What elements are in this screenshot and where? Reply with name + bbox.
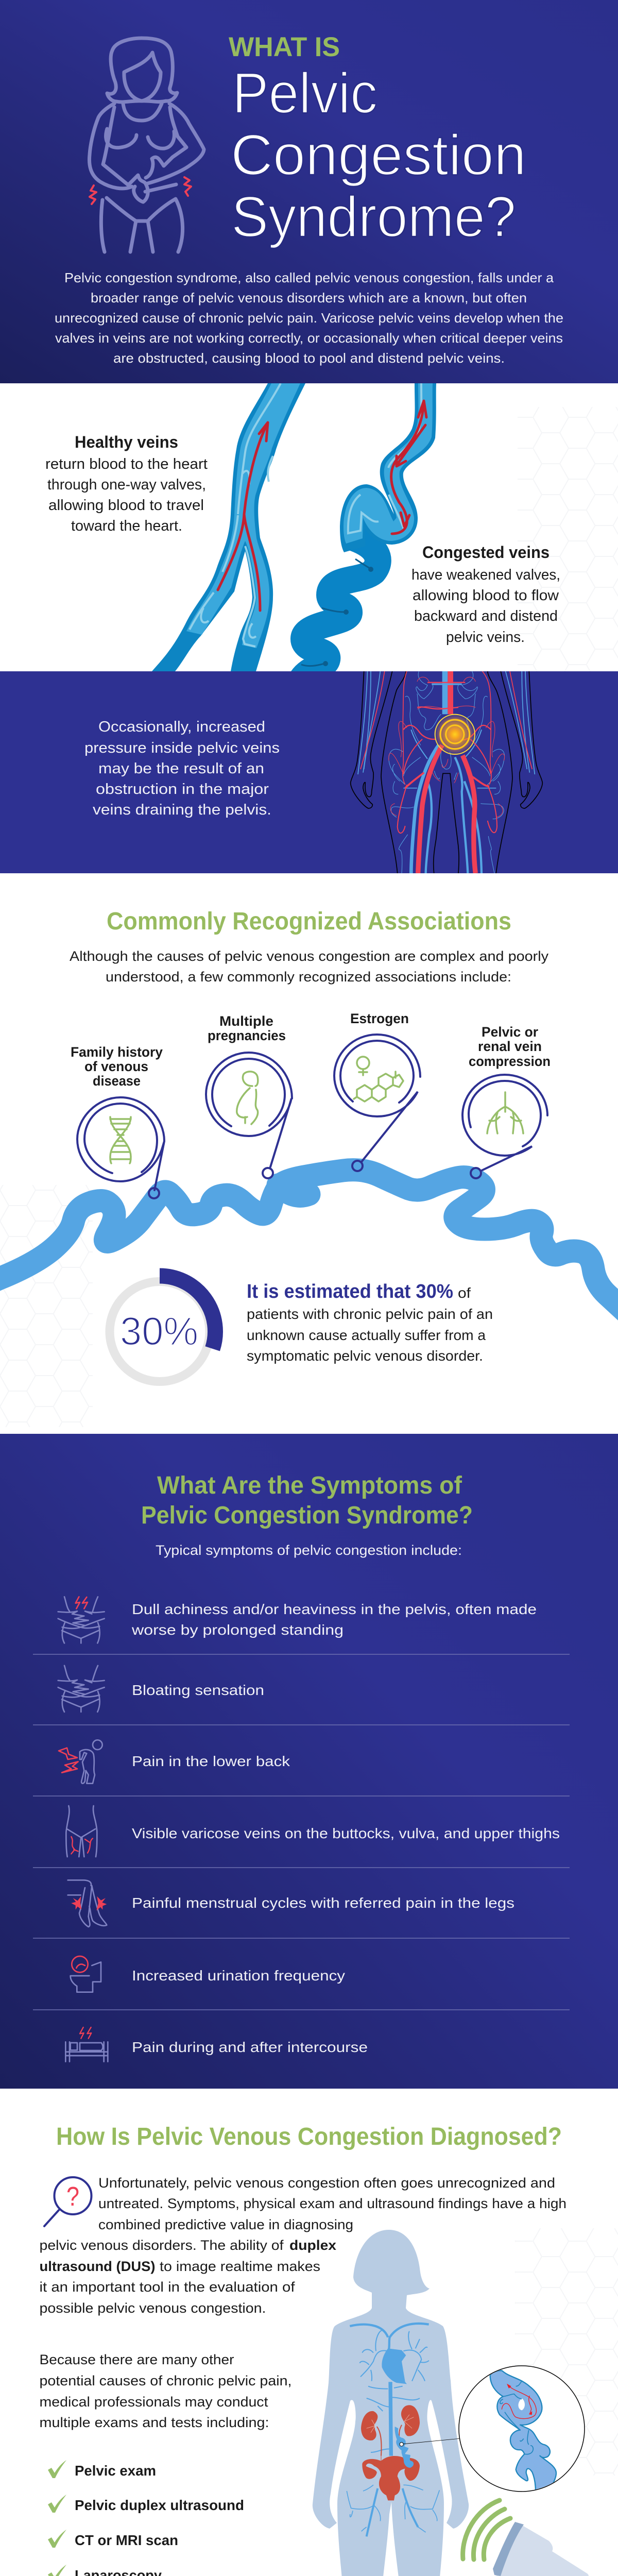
- illustration: healthy vein: [152, 383, 305, 671]
- callout: 30 percent statistic: unknown cause actually suffer from a: [247, 1327, 486, 1343]
- icon: magnifying glass question mark: [44, 2177, 92, 2226]
- text block: congested veins: pelvic veins.: [446, 629, 525, 646]
- symptom: dull achiness: Dull achiness and/or heaviness in the pelvis, often made: [132, 1601, 537, 1617]
- symptom: lower back pain: Pain in the lower back: [132, 1753, 290, 1769]
- symptom: urination frequency: Increased urination frequency: [132, 1968, 345, 1984]
- callout: pelvic or renal vein compression: renal vein: [478, 1039, 542, 1054]
- callout: pelvic or renal vein compression: Pelvic or: [482, 1024, 538, 1040]
- text block: healthy veins: [45, 433, 208, 534]
- heading: Pelvic Congestion Syndrome?: [141, 1502, 473, 1529]
- checklist: exams: Pelvic duplex ultrasound: [75, 2497, 244, 2513]
- text block: healthy veins: toward the heart.: [71, 518, 182, 534]
- callout: estrogen: Estrogen: [350, 1011, 409, 1026]
- callout: family history: [71, 1044, 164, 1198]
- text block: exams intro: Because there are many other: [39, 2352, 234, 2367]
- illustration: female silhouette with veins and organs: [313, 2230, 469, 2576]
- text block: congested veins: have weakened valves,: [411, 567, 560, 583]
- symptom: lower back pain: [59, 1740, 290, 1784]
- text block: obstruction: pressure inside pelvic veins: [84, 740, 280, 756]
- illustration: body vascular system: [351, 671, 542, 873]
- text block: diagnosis explanation: pelvic venous disorders. The ability of: [39, 2238, 284, 2253]
- text block: introduction: valves in veins are not working correctly, or occasionally when critical deeper veins: [55, 330, 563, 346]
- callout: estrogen: [334, 1011, 420, 1171]
- symptom: dull achiness: [58, 1597, 537, 1643]
- symptom: bloating: [58, 1666, 264, 1712]
- text block: obstruction: Occasionally, increased: [98, 719, 265, 735]
- checklist: exams: CT or MRI scan: [75, 2532, 178, 2548]
- text block: exams intro: multiple exams and tests including:: [39, 2415, 269, 2430]
- title: Congestion: [231, 123, 526, 187]
- text block: diagnosis explanation: possible pelvic venous congestion.: [39, 2300, 266, 2316]
- text block: congested veins: [411, 543, 560, 646]
- icon: woman with pelvic pain: [89, 38, 204, 252]
- text block: obstruction: [84, 719, 280, 818]
- text block: congested veins: backward and distend: [414, 608, 558, 624]
- symptom: pain during intercourse: [65, 2027, 368, 2062]
- symptom: bloating: Bloating sensation: [132, 1682, 264, 1698]
- callout: pelvic or renal vein compression: [462, 1024, 551, 1178]
- text block: diagnosis explanation: ultrasound (DUS): [39, 2259, 156, 2274]
- text block: obstruction: veins draining the pelvis.: [93, 802, 271, 818]
- text block: obstruction: obstruction in the major: [96, 781, 269, 798]
- checklist: exams: [48, 2460, 244, 2576]
- callout: 30 percent statistic: of: [458, 1285, 471, 1301]
- title: Pelvic: [232, 61, 377, 125]
- text block: healthy veins: Healthy veins: [75, 433, 178, 451]
- checklist: exams: Pelvic exam: [75, 2463, 156, 2479]
- heading: [141, 1472, 473, 1529]
- text block: associations intro: [70, 948, 549, 985]
- text block: exams intro: [39, 2352, 291, 2430]
- text block: diagnosis explanation: Unfortunately, pelvic venous congestion often goes unrecognized and: [98, 2175, 555, 2191]
- icon: magnifying glass question mark: ?: [66, 2182, 79, 2212]
- panel: header: [0, 0, 618, 383]
- text block: diagnosis explanation: duplex: [289, 2238, 336, 2253]
- text block: introduction: unrecognized cause of chronic pelvic pain. Varicose pelvic veins develop when the: [55, 310, 563, 326]
- callout: pelvic or renal vein compression: compression: [469, 1054, 551, 1069]
- text block: obstruction: may be the result of an: [98, 760, 264, 777]
- symptom: painful menstrual cycles: [68, 1880, 514, 1927]
- symptom: varicose veins: Visible varicose veins on the buttocks, vulva, and upper thighs: [132, 1825, 560, 1841]
- text block: healthy veins: allowing blood to travel: [48, 497, 204, 514]
- text block: diagnosis explanation: [39, 2175, 566, 2316]
- illustration: ultrasound probe: [463, 2500, 618, 2576]
- symptom: urination frequency: [71, 1956, 345, 1992]
- text block: symptoms intro: Typical symptoms of pelvic congestion include:: [156, 1543, 462, 1558]
- title: [229, 32, 526, 249]
- callout: 30 percent statistic: patients with chronic pelvic pain of an: [247, 1306, 493, 1322]
- callout: family history: disease: [93, 1073, 141, 1089]
- illustration: vein squiggle: [0, 1170, 618, 1319]
- text block: healthy veins: through one-way valves,: [47, 477, 206, 493]
- text block: diagnosis explanation: to image realtime makes: [160, 2259, 320, 2274]
- symptom: varicose veins: [66, 1806, 560, 1857]
- text block: diagnosis explanation: combined predictive value in diagnosing: [98, 2217, 353, 2232]
- heading: Commonly Recognized Associations: [107, 908, 511, 935]
- title: Syndrome?: [231, 185, 516, 249]
- text block: exams intro: potential causes of chronic pelvic pain,: [39, 2373, 291, 2388]
- callout: family history: of venous: [84, 1059, 148, 1074]
- symptom: painful menstrual cycles: Painful menstrual cycles with referred pain in the legs: [132, 1895, 514, 1911]
- callout: 30 percent statistic: It is estimated that 30%: [247, 1281, 453, 1302]
- text block: introduction: are obstructed, causing blood to pool and distend pelvic veins.: [113, 350, 505, 366]
- symptom: dull achiness: worse by prolonged standing: [131, 1622, 344, 1638]
- callout: 30 percent statistic: [247, 1281, 493, 1364]
- heading: What Are the Symptoms of: [157, 1472, 462, 1499]
- title: WHAT IS: [229, 32, 340, 62]
- callout: multiple pregnancies: pregnancies: [208, 1028, 286, 1043]
- text block: introduction: broader range of pelvic venous disorders which are a known, but often: [91, 290, 527, 306]
- panel: symptoms: [0, 1434, 618, 2089]
- text block: diagnosis explanation: it an important tool in the evaluation of: [39, 2279, 295, 2295]
- callout: 30 percent statistic: symptomatic pelvic venous disorder.: [247, 1348, 483, 1364]
- panel: obstruction: [0, 671, 618, 873]
- text block: healthy veins: return blood to the heart: [45, 456, 208, 472]
- panel: healthy and congested veins: [46, 383, 618, 671]
- heading: How Is Pelvic Venous Congestion Diagnosed?: [56, 2123, 562, 2150]
- text block: introduction: Pelvic congestion syndrome, also called pelvic venous congestion, falls under a: [64, 270, 554, 285]
- text block: introduction: [55, 270, 563, 366]
- callout: family history: Family history: [71, 1044, 163, 1060]
- text block: associations intro: Although the causes of pelvic venous congestion are complex and poorly: [70, 948, 549, 964]
- panel: diagnosis: [0, 2089, 618, 2576]
- text block: diagnosis explanation: untreated. Symptoms, physical exam and ultrasound findings have a high: [98, 2196, 566, 2211]
- callout: multiple pregnancies: [206, 1013, 292, 1178]
- callout: magnified varicose vein: [459, 2366, 585, 2492]
- illustration: congested vein: [301, 383, 436, 680]
- chart: 30 percent donut: 30%: [120, 1310, 198, 1354]
- callout: multiple pregnancies: Multiple: [219, 1013, 273, 1029]
- text block: associations intro: understood, a few commonly recognized associations include:: [106, 969, 511, 985]
- text block: congested veins: Congested veins: [422, 543, 550, 562]
- chart: 30 percent donut: [110, 1276, 215, 1382]
- panel: commonly recognized associations: [0, 873, 618, 1434]
- text block: exams intro: medical professionals may conduct: [39, 2394, 268, 2410]
- text block: congested veins: allowing blood to flow: [413, 587, 559, 604]
- symptom: pain during intercourse: Pain during and after intercourse: [132, 2039, 368, 2055]
